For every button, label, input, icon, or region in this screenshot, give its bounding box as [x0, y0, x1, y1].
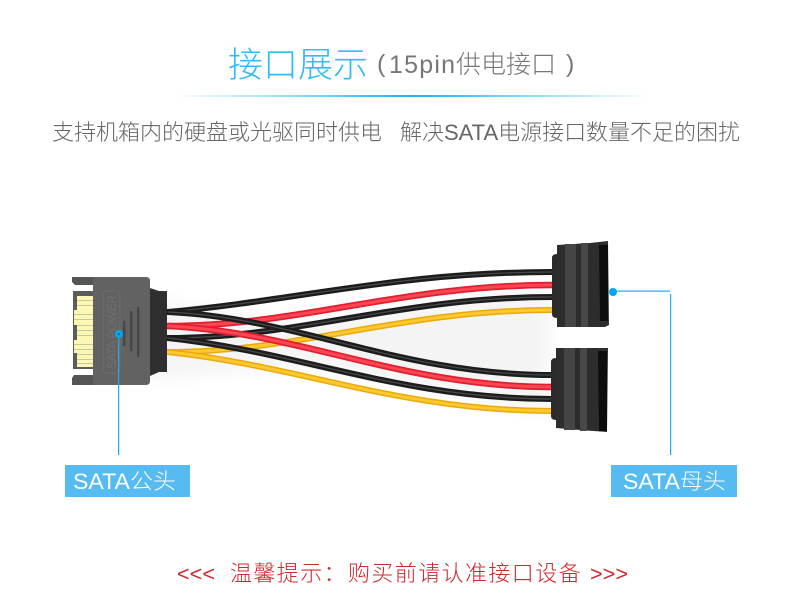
- title: 接口展示: [228, 46, 368, 85]
- footer notice: 温馨提示：: [230, 561, 347, 586]
- gold pins: [74, 296, 93, 367]
- upper wire bundle: [168, 272, 553, 352]
- lower wire bundle: [168, 312, 553, 411]
- callout: SATA female leader line: [609, 288, 671, 455]
- label: SATA male: SATA公头: [73, 469, 176, 494]
- label: SATA male: [65, 465, 190, 497]
- label: SATA female: [611, 465, 737, 497]
- title: ): [566, 50, 574, 78]
- footer notice: [177, 561, 628, 586]
- title: 15pin: [389, 51, 455, 79]
- title: (: [377, 50, 386, 78]
- subtitle text: 解决SATA电源接口数量不足的困扰: [400, 120, 740, 145]
- title: [228, 46, 574, 85]
- male SATA connector: [72, 277, 167, 385]
- male SATA connector: SATA POWER: [105, 295, 119, 369]
- lower female SATA connector: [551, 348, 608, 432]
- cable assembly: [72, 241, 609, 432]
- footer notice: <<<: [177, 563, 215, 586]
- label: SATA female: SATA母头: [623, 469, 726, 494]
- callout: SATA male leader line: [115, 330, 123, 455]
- subtitle text: [52, 120, 740, 145]
- subtitle text: 支持机箱内的硬盘或光驱同时供电: [52, 120, 382, 145]
- upper female SATA connector: [552, 241, 609, 327]
- cable shadow: [100, 285, 550, 415]
- footer notice: >>>: [590, 563, 628, 586]
- title: 供电接口: [456, 51, 556, 79]
- footer notice: 购买前请认准接口设备: [348, 561, 582, 586]
